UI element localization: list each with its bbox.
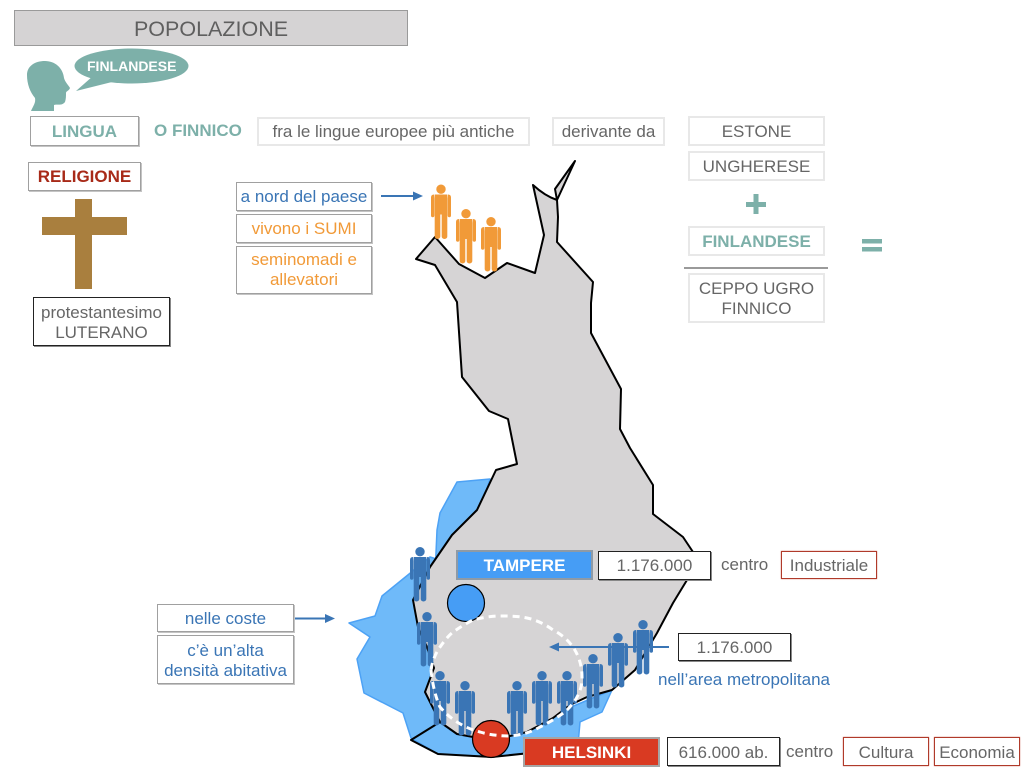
derivation label: [552, 117, 665, 146]
FINLANDESE box: [688, 226, 825, 256]
icon: speaking head: [27, 48, 188, 111]
sea along the coast: [349, 479, 612, 757]
TAMPERE label: TAMPERE: [484, 556, 565, 574]
Tampere marker: [448, 584, 484, 622]
Sumi label: vivono i SUMI: [252, 218, 356, 238]
density label: c’è un’alta: [187, 640, 264, 660]
coast label: [157, 604, 294, 632]
Tampere centro text: centro: [721, 555, 768, 574]
Industriale box: Industriale: [790, 556, 868, 574]
RELIGIONE heading: [28, 162, 141, 191]
Tampere population: 1.176.000: [617, 556, 692, 575]
metropolitan population: [678, 633, 791, 661]
language description: fra le lingue europee più antiche: [273, 122, 514, 141]
Cultura box: Cultura: [859, 742, 913, 762]
divider line: [684, 267, 828, 269]
HELSINKI label: [523, 737, 660, 767]
Helsinki marker: [472, 720, 510, 758]
language description: [257, 117, 530, 146]
Economia box: Economia: [939, 742, 1015, 762]
north location label: a nord del paese: [241, 186, 367, 206]
metropolitan area label: nell’area metropolitana: [658, 670, 830, 689]
title: [14, 10, 408, 46]
land outline: [413, 161, 693, 737]
O FINNICO label: O FINNICO: [154, 121, 242, 140]
arrow: to Lapland people: [381, 192, 423, 200]
TAMPERE label: [456, 550, 593, 580]
title: POPOLAZIONE: [134, 16, 288, 40]
derivation label: derivante da: [562, 122, 655, 141]
LINGUA heading: LINGUA: [52, 122, 117, 140]
Economia box: [934, 737, 1020, 766]
CEPPO UGRO FINNICO box: FINNICO: [722, 298, 791, 318]
seminomads label: allevatori: [270, 270, 338, 289]
HELSINKI label: HELSINKI: [552, 742, 631, 762]
density label: densità abitativa: [164, 660, 287, 680]
Tampere population: [598, 551, 711, 580]
north location label: [236, 182, 372, 211]
speech bubble label: FINLANDESE: [87, 58, 176, 74]
metropolitan population: 1.176.000: [697, 638, 772, 656]
arrow: to coast: [294, 614, 335, 623]
FINLANDESE box: FINLANDESE: [702, 232, 811, 250]
religion box: protestantesimo: [41, 302, 162, 322]
ESTONE box: [688, 116, 825, 146]
Helsinki population: [667, 737, 780, 766]
density label: [157, 635, 294, 684]
religion box: LUTERANO: [55, 322, 148, 342]
Helsinki population: 616.000 ab.: [679, 742, 768, 762]
ESTONE box: ESTONE: [722, 122, 791, 140]
Cultura box: [843, 737, 929, 766]
Helsinki centro text: centro: [786, 742, 833, 761]
seminomads label: seminomadi e: [251, 250, 357, 269]
arrow: to metropolitan area: [549, 642, 669, 652]
Industriale box: [781, 551, 877, 579]
coast label: nelle coste: [185, 609, 266, 628]
UNGHERESE box: [688, 151, 825, 181]
metropolitan area dashed outline: [431, 616, 582, 736]
seminomads label: [236, 246, 372, 294]
southern coast line: [411, 722, 530, 757]
coastal people: [410, 547, 653, 736]
CEPPO UGRO FINNICO box: CEPPO UGRO: [699, 278, 814, 298]
RELIGIONE heading: RELIGIONE: [38, 167, 131, 186]
LINGUA heading: [30, 116, 139, 146]
Lapland people: [431, 184, 501, 272]
UNGHERESE box: UNGHERESE: [703, 156, 810, 176]
CEPPO UGRO FINNICO box: [688, 273, 825, 323]
Sumi label: [236, 214, 372, 243]
religion box: [33, 297, 170, 346]
